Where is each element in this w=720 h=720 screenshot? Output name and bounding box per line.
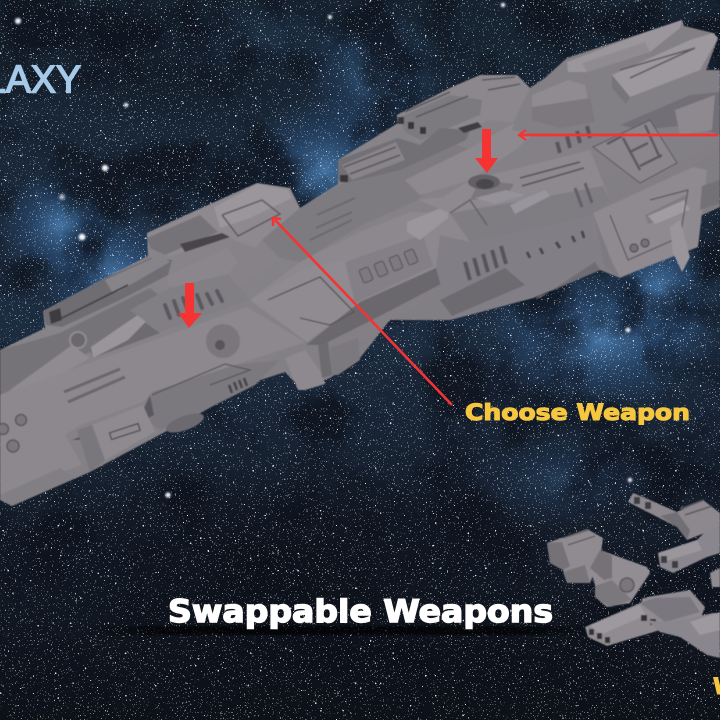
round bolts xyxy=(0,414,26,452)
right armour block xyxy=(593,167,707,277)
triangle armour panel xyxy=(593,120,677,183)
shadow bar under heading xyxy=(90,626,600,635)
mid vents xyxy=(465,246,506,280)
label: choose weapon: Choose Weapon xyxy=(465,401,690,426)
rear hull and barrel xyxy=(0,274,250,395)
plate recess circle xyxy=(206,324,240,358)
heading: swappable weapons: Swappable Weapons xyxy=(168,594,553,630)
red down arrow: upper socket xyxy=(475,129,498,173)
twin barrel gun xyxy=(658,527,720,573)
swappable weapon models xyxy=(547,493,720,658)
centre hull xyxy=(250,142,605,345)
triple barrel gun xyxy=(585,590,705,646)
rear lower gun xyxy=(43,255,172,327)
small hatch xyxy=(109,424,140,439)
underside pods xyxy=(285,338,360,390)
lower right gun xyxy=(647,612,720,658)
main deck xyxy=(418,150,610,242)
rocket pod right xyxy=(590,550,650,607)
top right double gun xyxy=(628,493,720,540)
callout arrow: to upper turret mount xyxy=(273,218,452,405)
partial gun at edge xyxy=(710,568,720,587)
plate slots xyxy=(64,369,125,402)
main forward plate xyxy=(0,307,305,506)
upper superstructure xyxy=(512,20,720,183)
spaceship xyxy=(0,20,720,506)
block vent fin xyxy=(670,220,690,272)
panel lines xyxy=(152,364,250,395)
rocket pod left xyxy=(547,529,603,583)
callout arrow: to rear mount xyxy=(519,130,718,140)
upper twin guns xyxy=(338,75,550,195)
window band xyxy=(345,235,433,303)
hull silhouette xyxy=(0,20,720,506)
rear upper gun xyxy=(147,183,300,295)
deck socket xyxy=(468,174,500,190)
vent ribs xyxy=(165,291,222,318)
red down arrow: lower socket xyxy=(178,283,202,328)
